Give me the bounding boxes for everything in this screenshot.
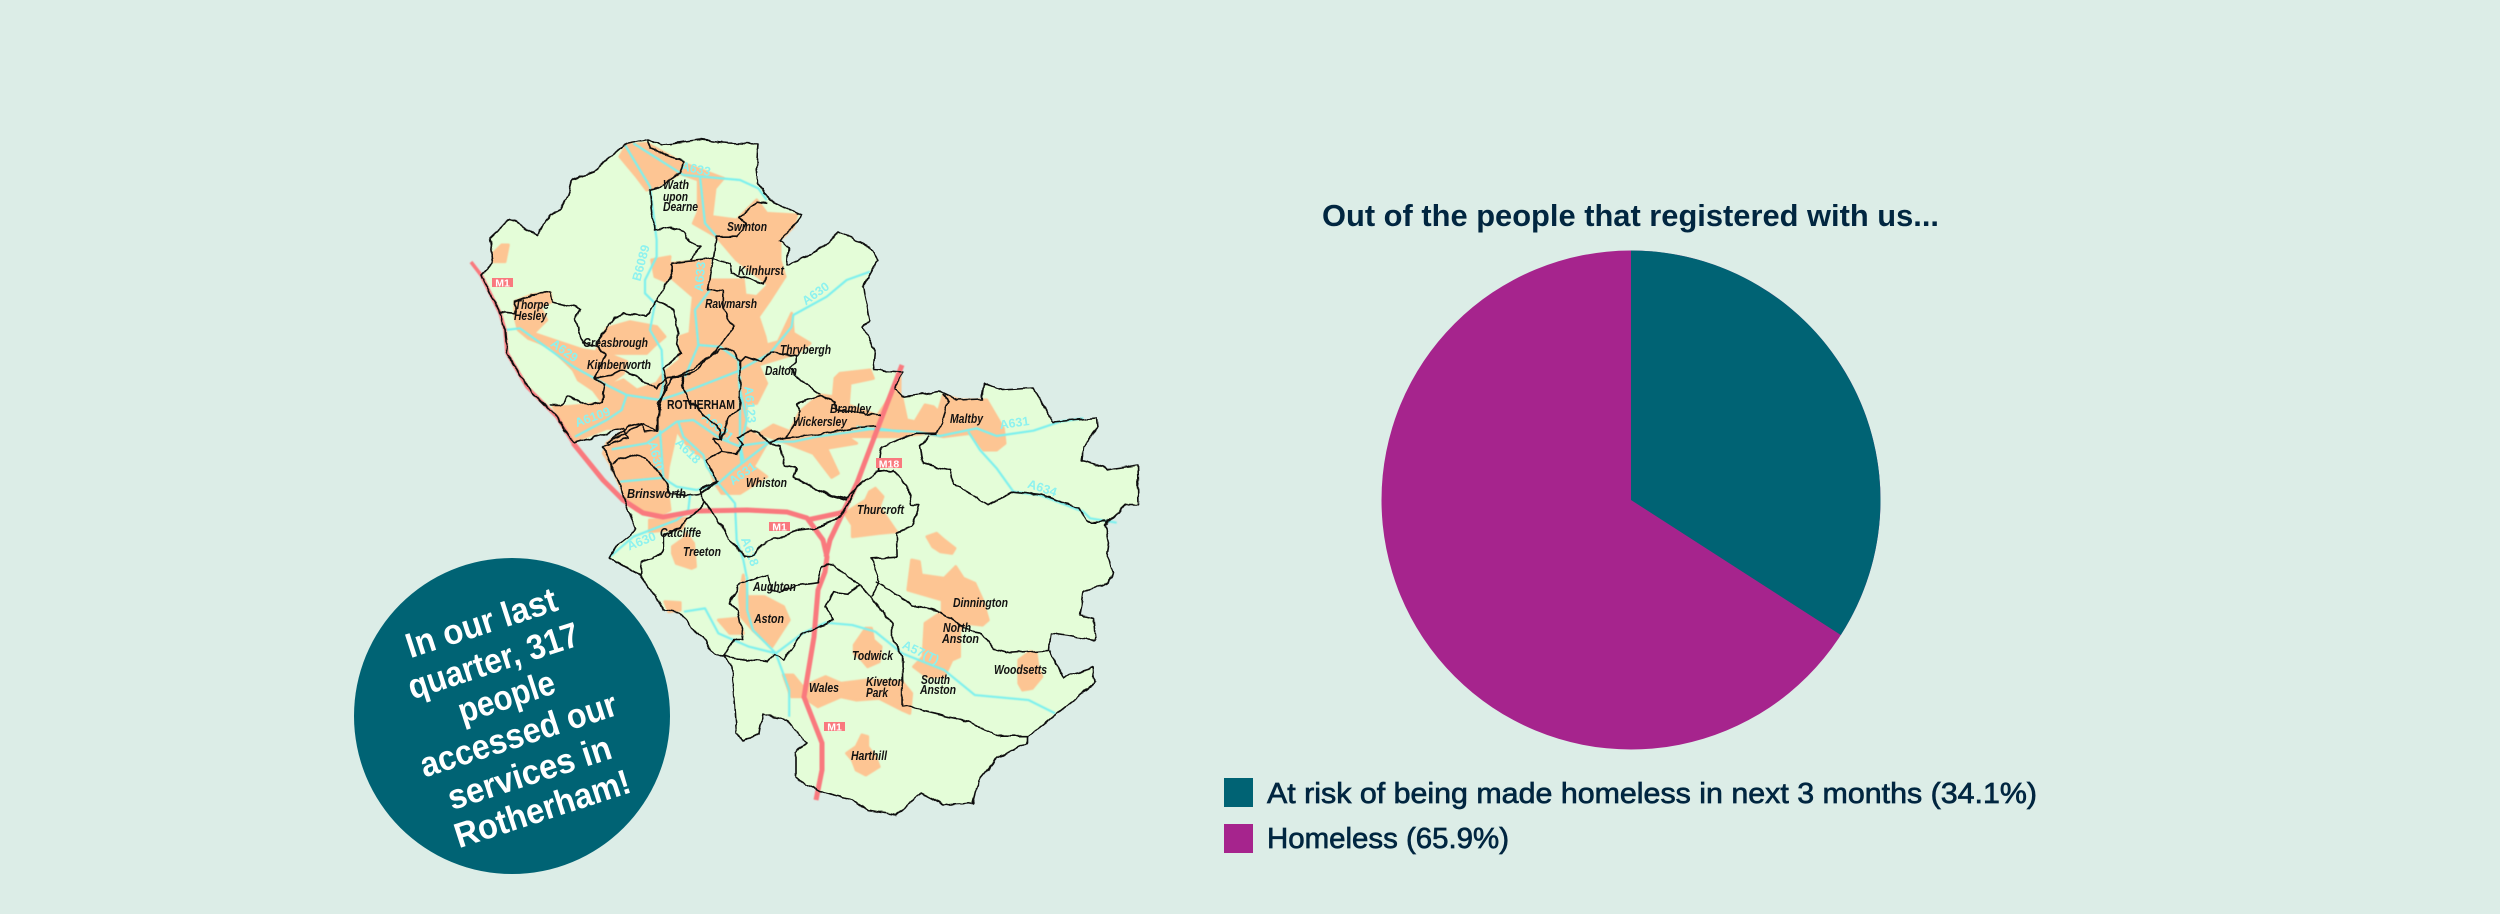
urban areas (orange) [493,143,1042,775]
place names: ROTHERHAM [667,398,735,412]
road labels (cyan): A618 [738,535,761,568]
place names: Dearne [663,200,698,214]
motorway badges: M1 [772,522,787,534]
place names: Anston [919,683,956,697]
place names: Harthill [851,749,887,763]
place names: Kilnhurst [738,264,785,278]
map of Rotherham borough [471,139,1139,815]
place names: Treeton [683,545,721,559]
legend [1224,778,2037,855]
A-roads (cyan) [505,143,1117,717]
place names: Swinton [727,220,767,234]
place names: Catcliffe [660,526,701,540]
place names: upon [663,190,688,204]
road labels (cyan): A6109 [573,404,612,430]
place names: Whiston [746,476,787,490]
callout text: Rotherham! [449,762,635,856]
legend: homeless: Homeless (65.9%) [1267,823,1509,855]
road labels (cyan): A6021 [699,410,736,444]
place names: Wales [809,681,839,695]
road labels (cyan): A631 [726,459,759,488]
callout circle [354,558,670,874]
road labels (cyan): A633 [692,261,708,292]
callout text: people [453,663,560,731]
chart heading: Out of the people that registered with us... [1322,198,1939,233]
place names: Maltby [950,412,984,426]
place names: Wickersley [793,415,848,429]
place names: Todwick [852,649,894,663]
ward boundaries [481,139,1139,815]
place names: Greasbrough [583,336,648,350]
place names: Dinnington [953,596,1008,610]
place names: Woodsetts [994,663,1047,677]
place names: Rawmarsh [705,297,757,311]
road labels (cyan): A630 [625,529,658,553]
motorway badges: M1 [827,722,842,734]
motorway badges: M1 [495,278,510,290]
place names: Anston [941,632,979,646]
road labels (cyan): A6123 [741,386,759,424]
road labels (cyan): A631 [999,414,1030,432]
road labels (cyan): B6089 [630,243,653,283]
motorway badges [492,278,902,734]
place names [514,178,1047,763]
motorways M1 and M18 [471,262,902,800]
road labels (cyan): A629 [548,336,581,365]
place names: Thorpe [515,298,549,312]
callout text: In our last [401,580,562,666]
place names: Kiveton [866,675,904,689]
place names: Bramley [830,402,872,416]
motorway badges: M18 [879,458,899,470]
place names: South [921,673,950,687]
place names: North [943,621,971,635]
place names: Thurcroft [857,503,905,517]
pie chart [1382,250,1880,750]
callout text: services in [443,728,616,818]
place names: Dalton [765,364,797,378]
map land area [481,139,1139,815]
road labels (cyan) [548,159,1059,667]
callout text: accessed our [415,685,622,785]
road labels (cyan): A633 [680,159,712,179]
callout text [401,580,635,856]
place names: Thrybergh [780,343,831,357]
place names: Aughton [752,580,796,594]
place names: Kimberworth [587,358,651,372]
place names: Wath [663,178,689,192]
legend: at risk: At risk of being made homeless in next 3 months (34.1%) [1267,778,2037,810]
place names: Aston [753,612,784,626]
place names: Park [866,686,889,700]
road labels (cyan): A634 [1026,477,1059,499]
road labels (cyan): A618 [672,436,703,467]
road labels (cyan): A630 [799,279,832,308]
callout text: quarter, 317 [403,615,584,707]
road labels (cyan): A57(T) [900,638,941,667]
road labels (cyan): A630 [645,440,667,472]
place names: Hesley [514,309,548,323]
place names: Brinsworth [627,487,686,501]
